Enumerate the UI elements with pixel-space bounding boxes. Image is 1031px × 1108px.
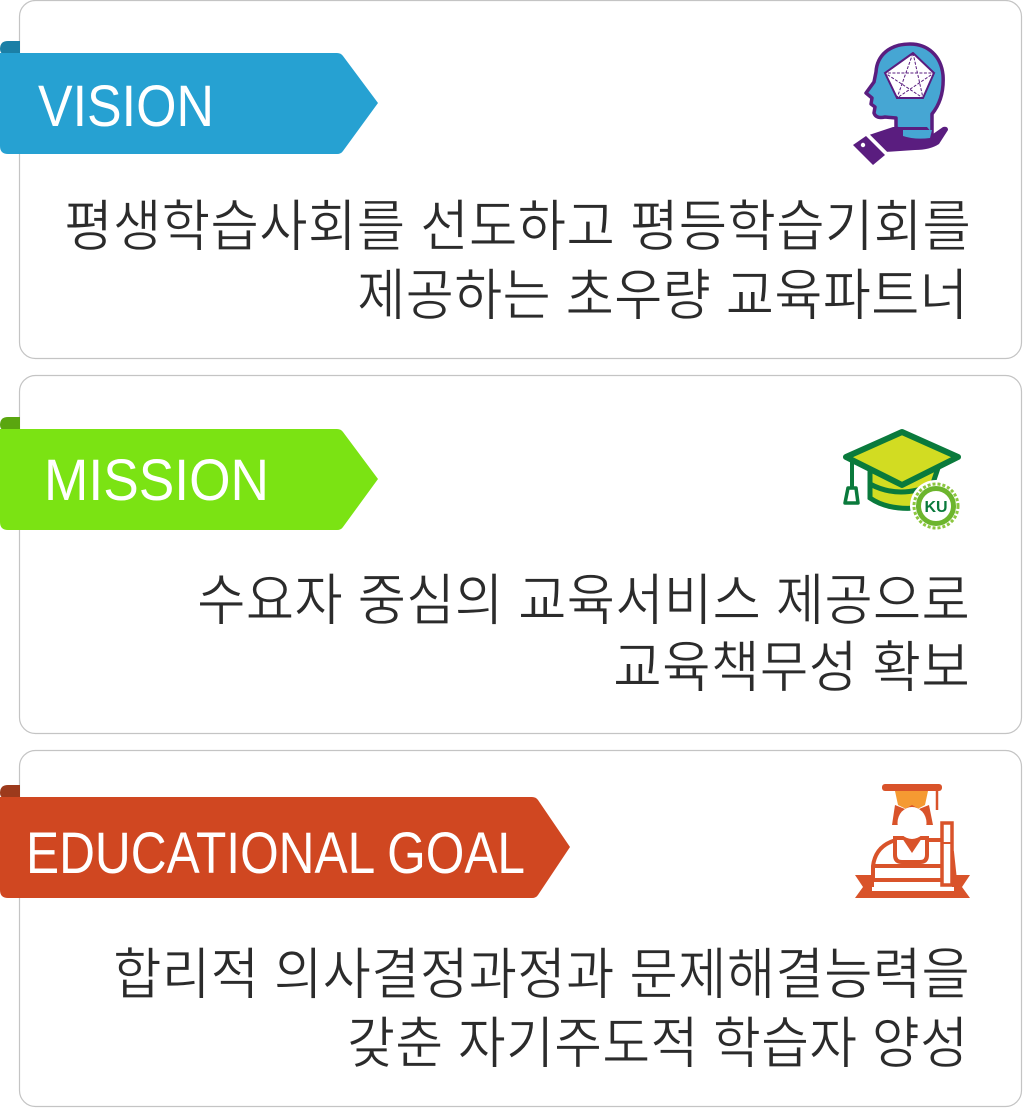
heading: vision: VISION [38,74,214,139]
mission ribbon fold [0,417,20,431]
panel: mission [0,376,1022,734]
mission ribbon [0,429,378,530]
goal text: 합리적 의사결정과정과 문제해결능력을 [113,943,970,1006]
mission card background [20,376,1022,734]
mission text: 수요자 중심의 교육서비스 제공으로 [197,569,970,632]
heading: educational goal: EDUCATIONAL GOAL [26,821,525,886]
mission text: 교육책무성 확보 [613,636,970,699]
goal ribbon fold [0,785,20,799]
vision text: 제공하는 초우량 교육파트너 [357,264,968,327]
goal text [113,943,970,1075]
icon: graduate with scroll and ribbon [855,784,970,898]
panel: vision [0,0,1022,358]
panel: educational goal [0,750,1022,1106]
goal ribbon [0,797,570,898]
icon: graduation cap with KU badge: KU [924,499,948,516]
icon: graduation cap with KU badge [845,432,962,532]
vision ribbon fold [0,41,20,55]
heading: mission: MISSION [44,448,269,513]
vision card background [20,0,1022,358]
vision ribbon [0,53,378,154]
vision text: 평생학습사회를 선도하고 평등학습기회를 [64,195,971,258]
vision text [64,195,971,327]
icon: head with pentagon on a hand [853,44,948,165]
goal text: 갖춘 자기주도적 학습자 양성 [347,1012,968,1075]
mission text [197,569,970,699]
goal card background [20,750,1022,1106]
